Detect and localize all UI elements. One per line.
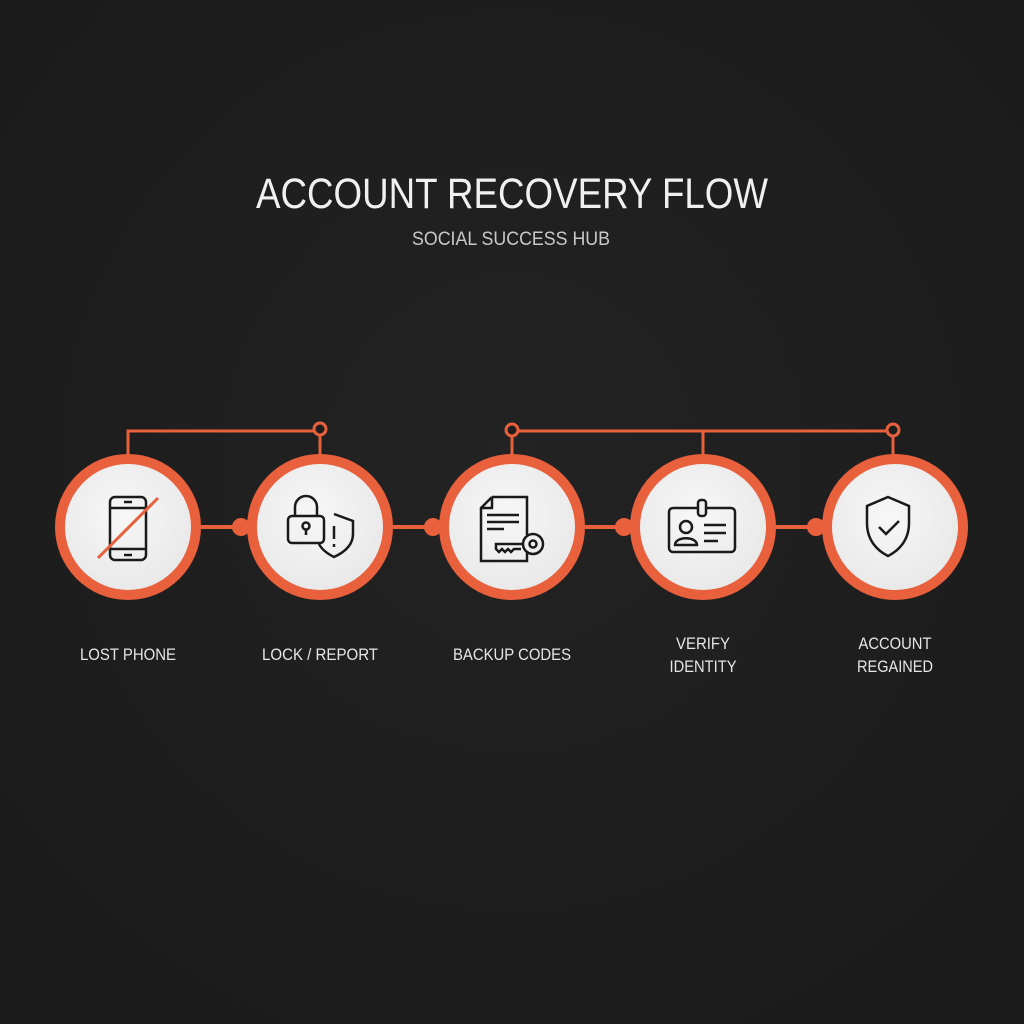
step 3: backup codes <box>439 454 585 600</box>
labels: LOCK / REPORT <box>262 646 378 664</box>
labels: VERIFY <box>676 635 730 653</box>
step 1: lost phone <box>55 454 201 600</box>
labels: LOST PHONE <box>80 646 176 664</box>
labels: REGAINED <box>857 658 933 676</box>
labels: IDENTITY <box>670 658 736 676</box>
step 2: lock / report <box>247 454 393 600</box>
connector: top brackets <box>128 423 899 458</box>
labels: BACKUP CODES <box>453 646 571 664</box>
icon: lock and shield <box>288 496 353 557</box>
icon: shield check <box>867 497 909 556</box>
subtitle: SOCIAL SUCCESS HUB <box>412 229 610 250</box>
connector: horizontal links <box>195 520 830 534</box>
labels: ACCOUNT <box>858 635 932 653</box>
step 5: account regained <box>822 454 968 600</box>
icon: id card <box>669 500 735 552</box>
labels <box>80 635 933 676</box>
title: ACCOUNT RECOVERY FLOW <box>256 170 768 218</box>
icon: document and key <box>481 497 543 561</box>
icon: phone crossed <box>98 497 158 560</box>
step 4: verify identity <box>630 454 776 600</box>
